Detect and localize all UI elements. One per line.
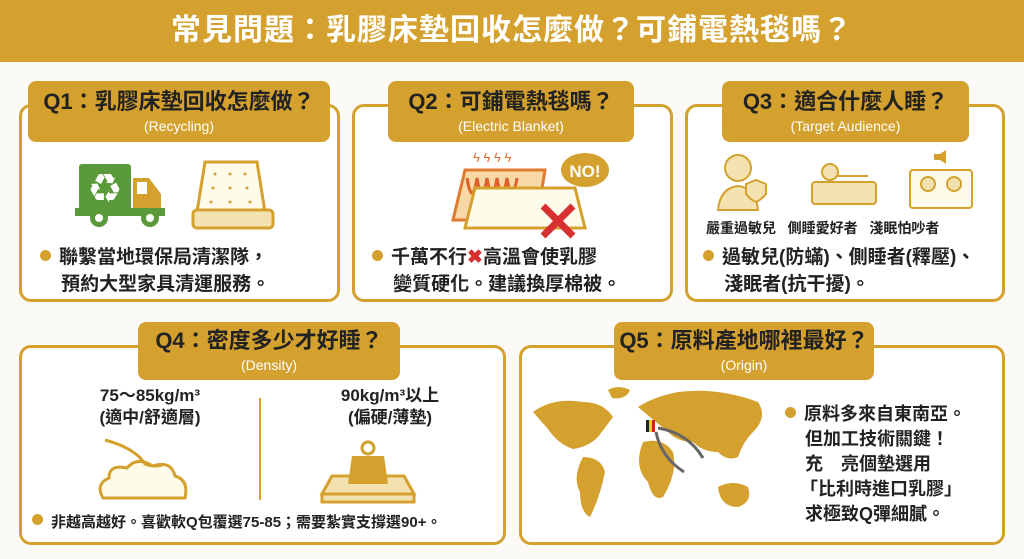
text: Q3 answer: 淺眠者(抗干擾)。 bbox=[724, 274, 870, 295]
header: Q5: (Origin) bbox=[721, 357, 767, 373]
panel: Q3 target audience bbox=[685, 104, 1005, 302]
icon: recycling truck and mattress: ♻ bbox=[90, 173, 120, 206]
panel: Q4 density bbox=[19, 345, 506, 545]
header: Q2 bbox=[388, 81, 634, 142]
icon: electric blanket with no: NO! bbox=[569, 162, 601, 181]
icon: electric blanket with no bbox=[451, 150, 609, 238]
text: Q2 answer bbox=[372, 246, 621, 295]
text: density firm: 90kg/m³以上 bbox=[341, 386, 439, 405]
header: Q3: Q3：適合什麼人睡？ bbox=[743, 89, 948, 114]
icon: audience icons bbox=[716, 150, 973, 211]
icon: recycling truck and mattress bbox=[75, 160, 274, 230]
header: Q2: (Electric Blanket) bbox=[458, 118, 564, 134]
header: Q2: Q2：可鋪電熱毯嗎？ bbox=[408, 89, 614, 114]
header: Q1: (Recycling) bbox=[144, 118, 214, 134]
text: Q5 answer: 但加工技術關鍵！ bbox=[805, 429, 949, 449]
header: Q3 bbox=[722, 81, 969, 142]
text: Q4 answer: 非越高越好。喜歡軟Q包覆選75-85；需要紮實支撐選90+。 bbox=[51, 514, 441, 531]
text: Q5 answer: 「比利時進口乳膠」 bbox=[800, 479, 962, 499]
text: density firm: (偏硬/薄墊) bbox=[348, 408, 432, 427]
text: density soft: (適中/舒適層) bbox=[99, 408, 201, 427]
icon: world map with arrow bbox=[533, 387, 762, 517]
text: Q5 answer: 原料多來自東南亞。 bbox=[804, 404, 966, 424]
text: Q1 answer: 聯繫當地環保局清潔隊， bbox=[59, 247, 268, 268]
text: Q3 answer bbox=[703, 246, 975, 295]
header: Q4: (Density) bbox=[241, 357, 297, 373]
icon: electric blanket with no: ϟ ϟ ϟ ϟ bbox=[473, 150, 511, 165]
text: Q3 answer: 過敏兒(防蟎)、側睡者(釋壓)、 bbox=[722, 247, 975, 268]
text: density soft: 75～85kg/m³ bbox=[100, 386, 200, 405]
text: Q1 answer: 預約大型家具清運服務。 bbox=[61, 274, 270, 295]
text: Q2 answer: 千萬不行✖高溫會使乳膠 bbox=[391, 247, 597, 268]
header: Q1: Q1：乳膠床墊回收怎麼做？ bbox=[43, 89, 315, 114]
text: Q1 answer bbox=[40, 246, 270, 295]
text: Q5 answer: 充 亮個墊選用 bbox=[805, 454, 931, 474]
panel: Q2 electric blanket bbox=[352, 104, 673, 302]
text: density firm bbox=[341, 386, 439, 427]
panel: Q1 recycling bbox=[19, 104, 340, 302]
header: Q5: Q5：原料產地哪裡最好？ bbox=[619, 328, 869, 353]
header: Q4 bbox=[138, 322, 400, 380]
text: density soft bbox=[99, 386, 201, 427]
header: Q3: (Target Audience) bbox=[791, 118, 900, 134]
title bbox=[0, 0, 1024, 62]
header: Q5 bbox=[614, 322, 874, 380]
icon: hand on foam bbox=[98, 438, 188, 500]
labels: audience: 嚴重過敏兒 側睡愛好者 淺眠怕吵者 bbox=[706, 220, 939, 236]
title: 常見問題：乳膠床墊回收怎麼做？可鋪電熱毯嗎？ bbox=[171, 14, 853, 47]
header: Q1 bbox=[28, 81, 330, 142]
panel: Q5 origin bbox=[519, 345, 1005, 545]
icon: weight on pad bbox=[320, 440, 416, 504]
text: Q2 answer: 變質硬化。建議換厚棉被。 bbox=[393, 274, 621, 295]
header: Q4: Q4：密度多少才好睡？ bbox=[155, 328, 383, 353]
text: Q5 answer bbox=[785, 404, 966, 524]
text: Q5 answer: 求極致Q彈細膩。 bbox=[805, 504, 945, 524]
